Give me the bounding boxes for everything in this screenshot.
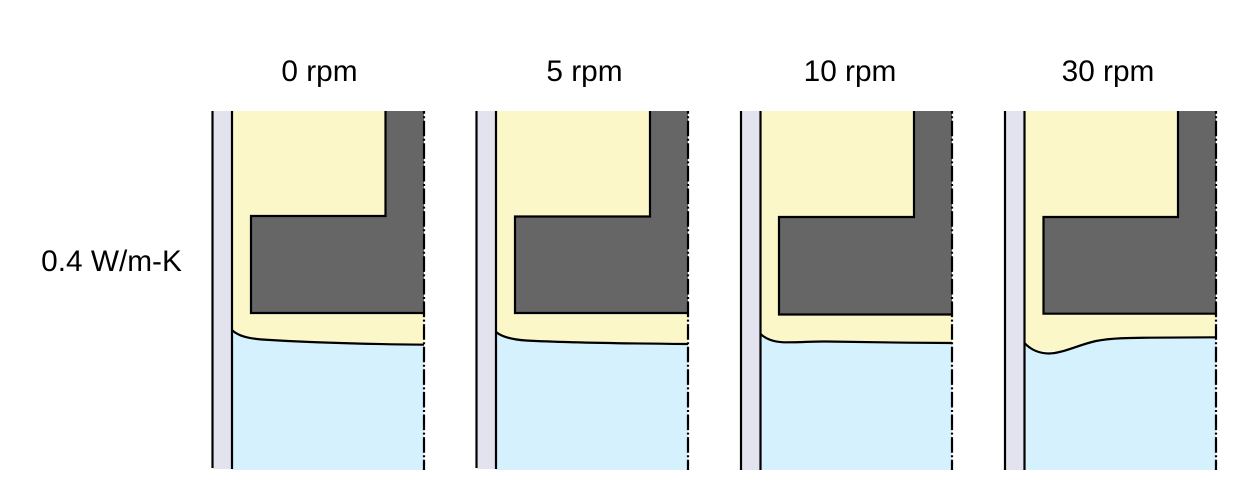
outlines — [741, 111, 952, 470]
crucible wall — [741, 111, 760, 470]
column heading: 10 rpm: 10 rpm — [804, 55, 896, 88]
liquid region — [1024, 337, 1216, 470]
row label: thermal conductivity: 0.4 W/m-K — [41, 245, 182, 278]
crucible wall — [1005, 111, 1024, 470]
panel: 5 rpm — [476, 111, 688, 470]
crystal region — [1044, 111, 1216, 314]
outlines — [212, 111, 424, 469]
melt region — [232, 111, 424, 351]
panel: 30 rpm — [1005, 111, 1216, 470]
symmetry axis — [1215, 111, 1217, 470]
crucible wall — [212, 111, 232, 469]
interface curve — [496, 332, 688, 344]
melt region — [496, 111, 688, 351]
interface curve — [232, 330, 424, 345]
symmetry axis — [423, 111, 425, 470]
melt region — [1024, 111, 1216, 351]
interface curve — [760, 334, 952, 343]
liquid region — [232, 330, 424, 470]
melt region — [760, 111, 952, 351]
interface curve — [1024, 337, 1216, 354]
liquid region — [496, 332, 688, 470]
crystal region — [779, 111, 952, 314]
column heading: 5 rpm: 5 rpm — [546, 55, 623, 88]
column heading: 30 rpm: 30 rpm — [1062, 55, 1154, 88]
symmetry axis — [951, 111, 953, 470]
crystal region — [515, 111, 688, 313]
liquid region — [760, 334, 952, 470]
crystal region — [251, 111, 424, 313]
panel: 10 rpm — [741, 111, 952, 470]
panel: 0 rpm — [212, 111, 424, 470]
column heading: 0 rpm: 0 rpm — [281, 55, 358, 88]
symmetry axis — [687, 111, 689, 470]
outlines — [476, 111, 688, 469]
outlines — [1005, 111, 1216, 470]
crucible wall — [476, 111, 496, 469]
